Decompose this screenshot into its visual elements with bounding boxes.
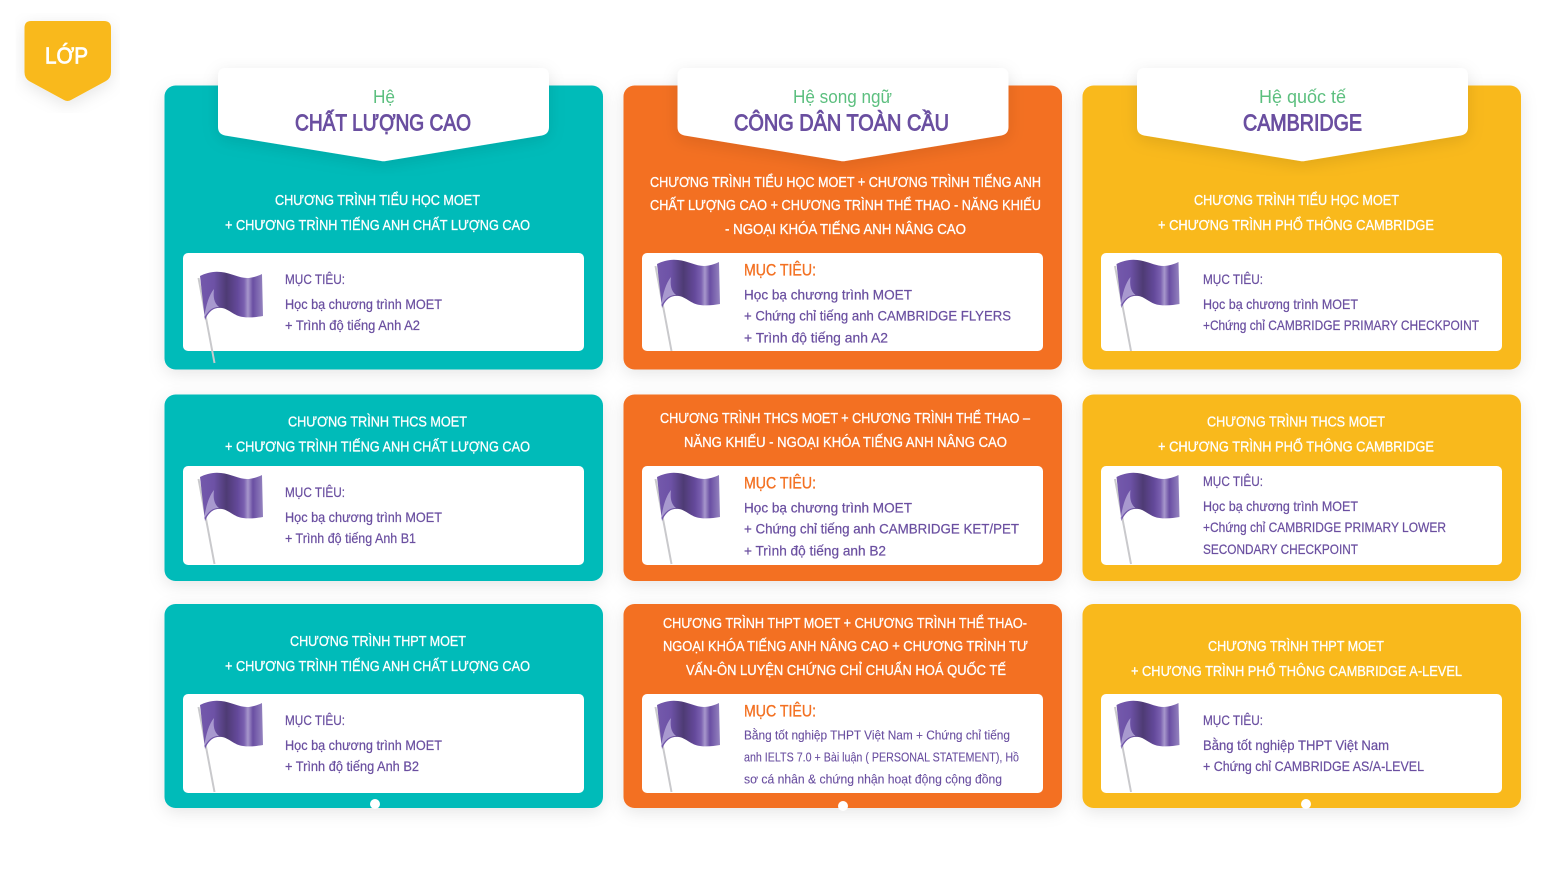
header tab: Cambridge: CAMBRIDGE	[1243, 110, 1362, 136]
goal box	[183, 694, 584, 793]
panel: Công dân toàn cầu, tiểu học	[624, 68, 1062, 370]
goal box: +Chứng chỉ CAMBRIDGE PRIMARY CHECKPOINT	[1203, 317, 1479, 333]
goal box: + Trình độ tiếng anh A2	[744, 330, 888, 346]
panel: Chất lượng cao, tiểu học	[164, 68, 603, 370]
goal box: Học bạ chương trình MOET	[744, 500, 912, 516]
goal box: Học bạ chương trình MOET	[285, 509, 442, 525]
goal box	[1101, 694, 1502, 793]
goal box: MỤC TIÊU:	[744, 702, 816, 720]
goal box: + Chứng chỉ CAMBRIDGE AS/A-LEVEL	[1203, 758, 1424, 774]
goal box: anh IELTS 7.0 + Bài luận ( PERSONAL STATEMENT), Hồ	[744, 750, 1019, 764]
header tab: Chất lượng cao: CHẤT LƯỢNG CAO	[295, 108, 471, 136]
header tab: Công dân toàn cầu	[678, 68, 1008, 161]
programme text: CHƯƠNG TRÌNH TIỂU HỌC MOET	[275, 191, 480, 209]
programme text: VẤN-ÔN LUYỆN CHỨNG CHỈ CHUẨN HOÁ QUỐC TẾ	[686, 661, 1006, 679]
goal box: + Trình độ tiếng anh B2	[744, 542, 886, 558]
goal box	[642, 466, 1043, 565]
connector dot	[838, 801, 848, 811]
programme text	[225, 633, 530, 675]
goal box: MỤC TIÊU:	[285, 712, 345, 728]
goal box: + Trình độ tiếng Anh B2	[285, 758, 419, 774]
programme text: CHƯƠNG TRÌNH THPT MOET + CHƯƠNG TRÌNH THỂ THAO-	[663, 614, 1027, 632]
goal box: Học bạ chương trình MOET	[1203, 498, 1358, 514]
header tab: Cambridge: Hệ quốc tế	[1259, 87, 1346, 107]
header tab: Chất lượng cao	[218, 68, 549, 161]
goal box: Học bạ chương trình MOET	[285, 737, 442, 753]
goal box	[1101, 253, 1502, 351]
programme text: + CHƯƠNG TRÌNH TIẾNG ANH CHẤT LƯỢNG CAO	[225, 658, 530, 675]
header tab: Công dân toàn cầu: Hệ song ngữ	[793, 87, 892, 107]
programme text: CHƯƠNG TRÌNH TIỂU HỌC MOET	[1194, 191, 1399, 209]
panel: Cambridge, tiểu học	[1082, 68, 1521, 370]
goal box: + Chứng chỉ tiếng anh CAMBRIDGE FLYERS	[744, 308, 1011, 324]
programme text	[1158, 191, 1434, 234]
programme text: + CHƯƠNG TRÌNH PHỔ THÔNG CAMBRIDGE	[1158, 438, 1434, 456]
panel: Chất lượng cao, THCS	[164, 394, 603, 581]
programme text: CHẤT LƯỢNG CAO + CHƯƠNG TRÌNH THỂ THAO - NĂNG KHIẾU	[650, 196, 1041, 214]
header tab: Cambridge	[1137, 68, 1468, 161]
connector dot	[1301, 799, 1311, 809]
header tab: Chất lượng cao: Hệ	[373, 87, 395, 107]
panel: Công dân toàn cầu, THCS	[624, 394, 1062, 581]
goal box: MỤC TIÊU:	[285, 271, 345, 287]
goal box: + Trình độ tiếng Anh A2	[285, 317, 420, 333]
programme text: CHƯƠNG TRÌNH THCS MOET + CHƯƠNG TRÌNH THỂ THAO –	[660, 409, 1031, 427]
programme text: + CHƯƠNG TRÌNH PHỔ THÔNG CAMBRIDGE A-LEVEL	[1131, 662, 1462, 680]
goal box: Bằng tốt nghiệp THPT Việt Nam	[1203, 737, 1389, 753]
badge: LỚP: LỚP	[45, 42, 88, 68]
programme text	[650, 173, 1041, 238]
programme text: CHƯƠNG TRÌNH THCS MOET	[288, 414, 467, 430]
goal box	[642, 694, 1043, 793]
goal box: MỤC TIÊU:	[1203, 271, 1263, 287]
goal box: MỤC TIÊU:	[1203, 473, 1263, 489]
goal box: MỤC TIÊU:	[744, 474, 816, 492]
programme text: CHƯƠNG TRÌNH THCS MOET	[1207, 414, 1385, 430]
panel: Chất lượng cao, THPT	[164, 604, 603, 809]
programme text: CHƯƠNG TRÌNH THPT MOET	[1208, 638, 1384, 655]
programme text: NĂNG KHIẾU - NGOẠI KHÓA TIẾNG ANH NÂNG CAO	[684, 434, 1007, 451]
header tab: Công dân toàn cầu: CÔNG DÂN TOÀN CẦU	[734, 108, 949, 136]
programme text: CHƯƠNG TRÌNH THPT MOET	[290, 633, 466, 650]
goal box: Bằng tốt nghiệp THPT Việt Nam + Chứng chỉ tiếng	[744, 728, 1010, 742]
goal box: MỤC TIÊU:	[1203, 712, 1263, 728]
badge: LỚP	[24, 21, 111, 101]
goal box: MỤC TIÊU:	[744, 260, 816, 280]
panel: Cambridge, THCS	[1082, 394, 1521, 581]
goal box: MỤC TIÊU:	[285, 484, 345, 500]
programme text	[225, 191, 530, 234]
programme text: CHƯƠNG TRÌNH TIỂU HỌC MOET + CHƯƠNG TRÌNH TIẾNG ANH	[650, 173, 1041, 191]
goal box	[1101, 466, 1502, 565]
connector dot	[370, 799, 380, 809]
goal box: Học bạ chương trình MOET	[744, 286, 912, 302]
panel: Công dân toàn cầu, THPT	[624, 604, 1062, 811]
goal box: +Chứng chỉ CAMBRIDGE PRIMARY LOWER	[1203, 519, 1446, 535]
goal box: Học bạ chương trình MOET	[285, 296, 442, 312]
programme text	[1131, 638, 1462, 680]
goal box	[642, 253, 1043, 351]
goal box: sơ cá nhân & chứng nhận hoạt động cộng đồng	[744, 772, 1002, 786]
programme text: + CHƯƠNG TRÌNH PHỔ THÔNG CAMBRIDGE	[1158, 216, 1434, 234]
panel: Cambridge, THPT	[1082, 604, 1521, 809]
programme text: NGOẠI KHÓA TIẾNG ANH NÂNG CAO + CHƯƠNG TRÌNH TƯ	[663, 638, 1028, 655]
programme text	[1158, 414, 1434, 456]
programme text	[660, 409, 1031, 451]
goal box	[183, 466, 584, 565]
programme text: - NGOẠI KHÓA TIẾNG ANH NÂNG CAO	[725, 221, 966, 238]
programme text	[663, 614, 1028, 679]
goal box: + Trình độ tiếng Anh B1	[285, 530, 416, 546]
programme text: + CHƯƠNG TRÌNH TIẾNG ANH CHẤT LƯỢNG CAO	[225, 438, 530, 456]
goal box	[183, 253, 584, 363]
goal box: Học bạ chương trình MOET	[1203, 296, 1358, 312]
programme text: + CHƯƠNG TRÌNH TIẾNG ANH CHẤT LƯỢNG CAO	[225, 217, 530, 234]
goal box: + Chứng chỉ tiếng anh CAMBRIDGE KET/PET	[744, 520, 1019, 536]
goal box: SECONDARY CHECKPOINT	[1203, 541, 1358, 557]
programme text	[225, 414, 530, 456]
